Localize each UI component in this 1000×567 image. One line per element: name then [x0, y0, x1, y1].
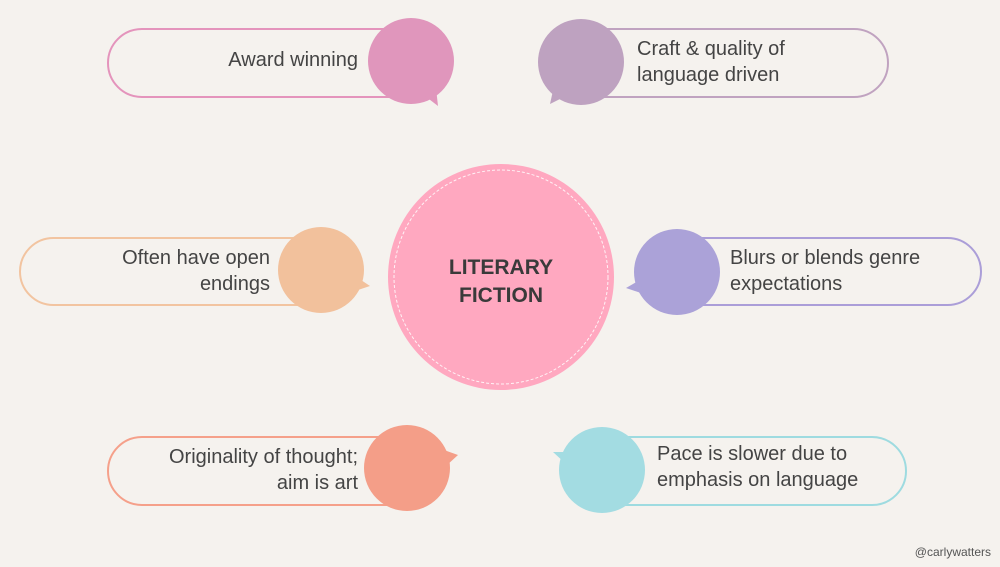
icon: speech bubble mauve [538, 19, 624, 105]
icon: speech bubble cyan [553, 427, 645, 513]
panel: craft & quality: language driven [637, 64, 779, 86]
panel: originality: aim is art [277, 472, 358, 494]
panel: blurs genre [626, 229, 981, 315]
panel: pace: Pace is slower due to [657, 443, 847, 465]
panel: pace: emphasis on language [657, 469, 858, 491]
center circle: literary fiction: LITERARY [449, 256, 553, 279]
panel: pace [553, 427, 906, 513]
panel: originality [108, 425, 458, 511]
panel: open endings: Often have open [122, 247, 270, 269]
panel: originality: Originality of thought; [169, 446, 358, 468]
panel: award winning [108, 18, 454, 106]
icon: speech bubble lavender [626, 229, 720, 315]
panel: craft & quality: Craft & quality of [637, 38, 785, 60]
panel: open endings: endings [200, 273, 270, 295]
panel: blurs genre: expectations [730, 273, 842, 295]
icon: speech bubble coral [364, 425, 458, 511]
panel: award winning: Award winning [228, 49, 358, 71]
icon: speech bubble peach [278, 227, 370, 313]
panel: craft & quality [538, 19, 888, 105]
center circle: literary fiction: FICTION [459, 284, 543, 307]
panel: open endings [20, 227, 370, 313]
credit: @carlywatters [915, 545, 991, 559]
icon: speech bubble pink [368, 18, 454, 106]
panel: blurs genre: Blurs or blends genre [730, 247, 920, 269]
center circle: literary fiction [388, 164, 614, 390]
